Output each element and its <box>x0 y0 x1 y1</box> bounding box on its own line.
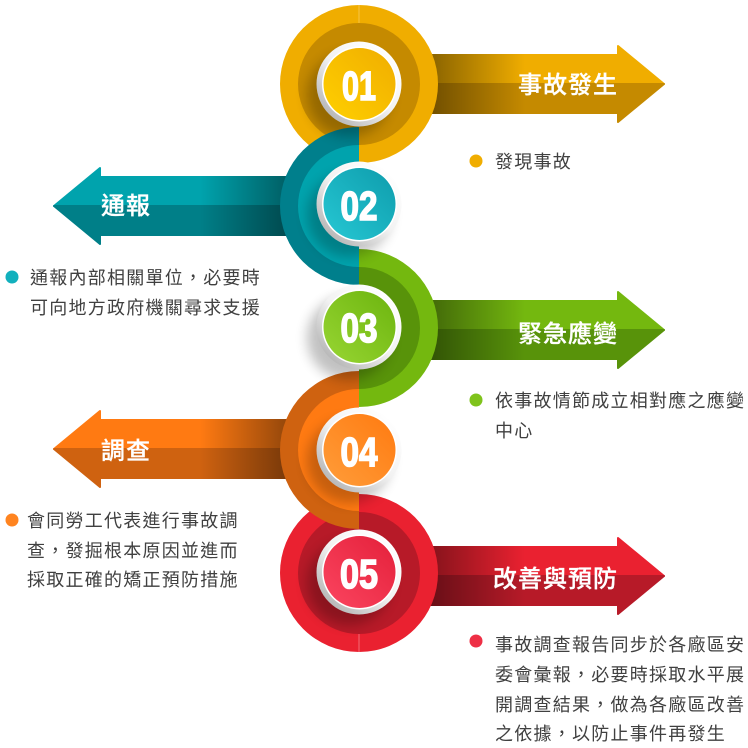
badge: 04 <box>307 408 402 503</box>
badge: 02 <box>307 162 402 257</box>
badge: 05 <box>307 530 402 625</box>
text: step 3: 依事故情節成立相對應之應變 <box>495 390 745 411</box>
arrow: 調查 <box>54 411 320 487</box>
badge: 03: 03 <box>340 305 378 351</box>
text: step 1: 發現事故 <box>495 152 572 172</box>
badge: 03 <box>307 284 402 380</box>
text: step 2: 可向地方政府機關尋求支援 <box>30 298 261 318</box>
ring: step 5 full circle <box>280 494 438 652</box>
heading: 改善與預防: 改善與預防 <box>493 566 618 593</box>
ring: step 3 right half <box>359 249 438 407</box>
heading: 緊急應變: 緊急應變 <box>518 320 618 348</box>
text: step 3: 中心 <box>495 421 534 441</box>
arrow: 緊急應變 <box>400 292 664 368</box>
badge: 04: 04 <box>340 429 378 475</box>
text: step 4: 查，發掘根本原因並進而 <box>27 541 239 561</box>
bullet: step 1 <box>470 154 482 168</box>
bullet: step 3 <box>470 394 482 406</box>
ring: step 2 left half <box>280 127 359 285</box>
text: step 4: 會同勞工代表進行事故調 <box>27 511 239 531</box>
text: step 4: 採取正確的矯正預防措施 <box>27 570 239 590</box>
text: step 5: 事故調查報告同步於各廠區安 <box>495 634 745 655</box>
badge: 01: 01 <box>342 63 376 109</box>
arrow: 改善與預防 <box>400 538 664 614</box>
text: step 2: 通報內部相關單位，必要時 <box>30 268 261 288</box>
text: step 5: 之依據，以防止事件再發生 <box>495 724 726 744</box>
text: step 5: 委會彙報，必要時採取水平展 <box>495 665 745 685</box>
heading: 通報: 通報 <box>101 193 151 220</box>
heading: 調查: 調查 <box>101 438 151 465</box>
badge: 05: 05 <box>340 551 378 597</box>
badge: 01 <box>307 42 402 137</box>
arrow: 事故發生 <box>400 46 664 122</box>
heading: 事故發生: 事故發生 <box>518 72 618 99</box>
arrow: 通報 <box>54 168 320 244</box>
ring: step 4 left half <box>280 371 359 529</box>
bullet: step 5 <box>470 634 482 648</box>
ring: step 1 full circle <box>280 5 438 163</box>
bullet: step 4 <box>6 514 18 526</box>
text: step 5: 開調查結果，做為各廠區改善 <box>495 694 745 715</box>
badge: 02: 02 <box>340 183 378 229</box>
bullet: step 2 <box>6 270 18 284</box>
